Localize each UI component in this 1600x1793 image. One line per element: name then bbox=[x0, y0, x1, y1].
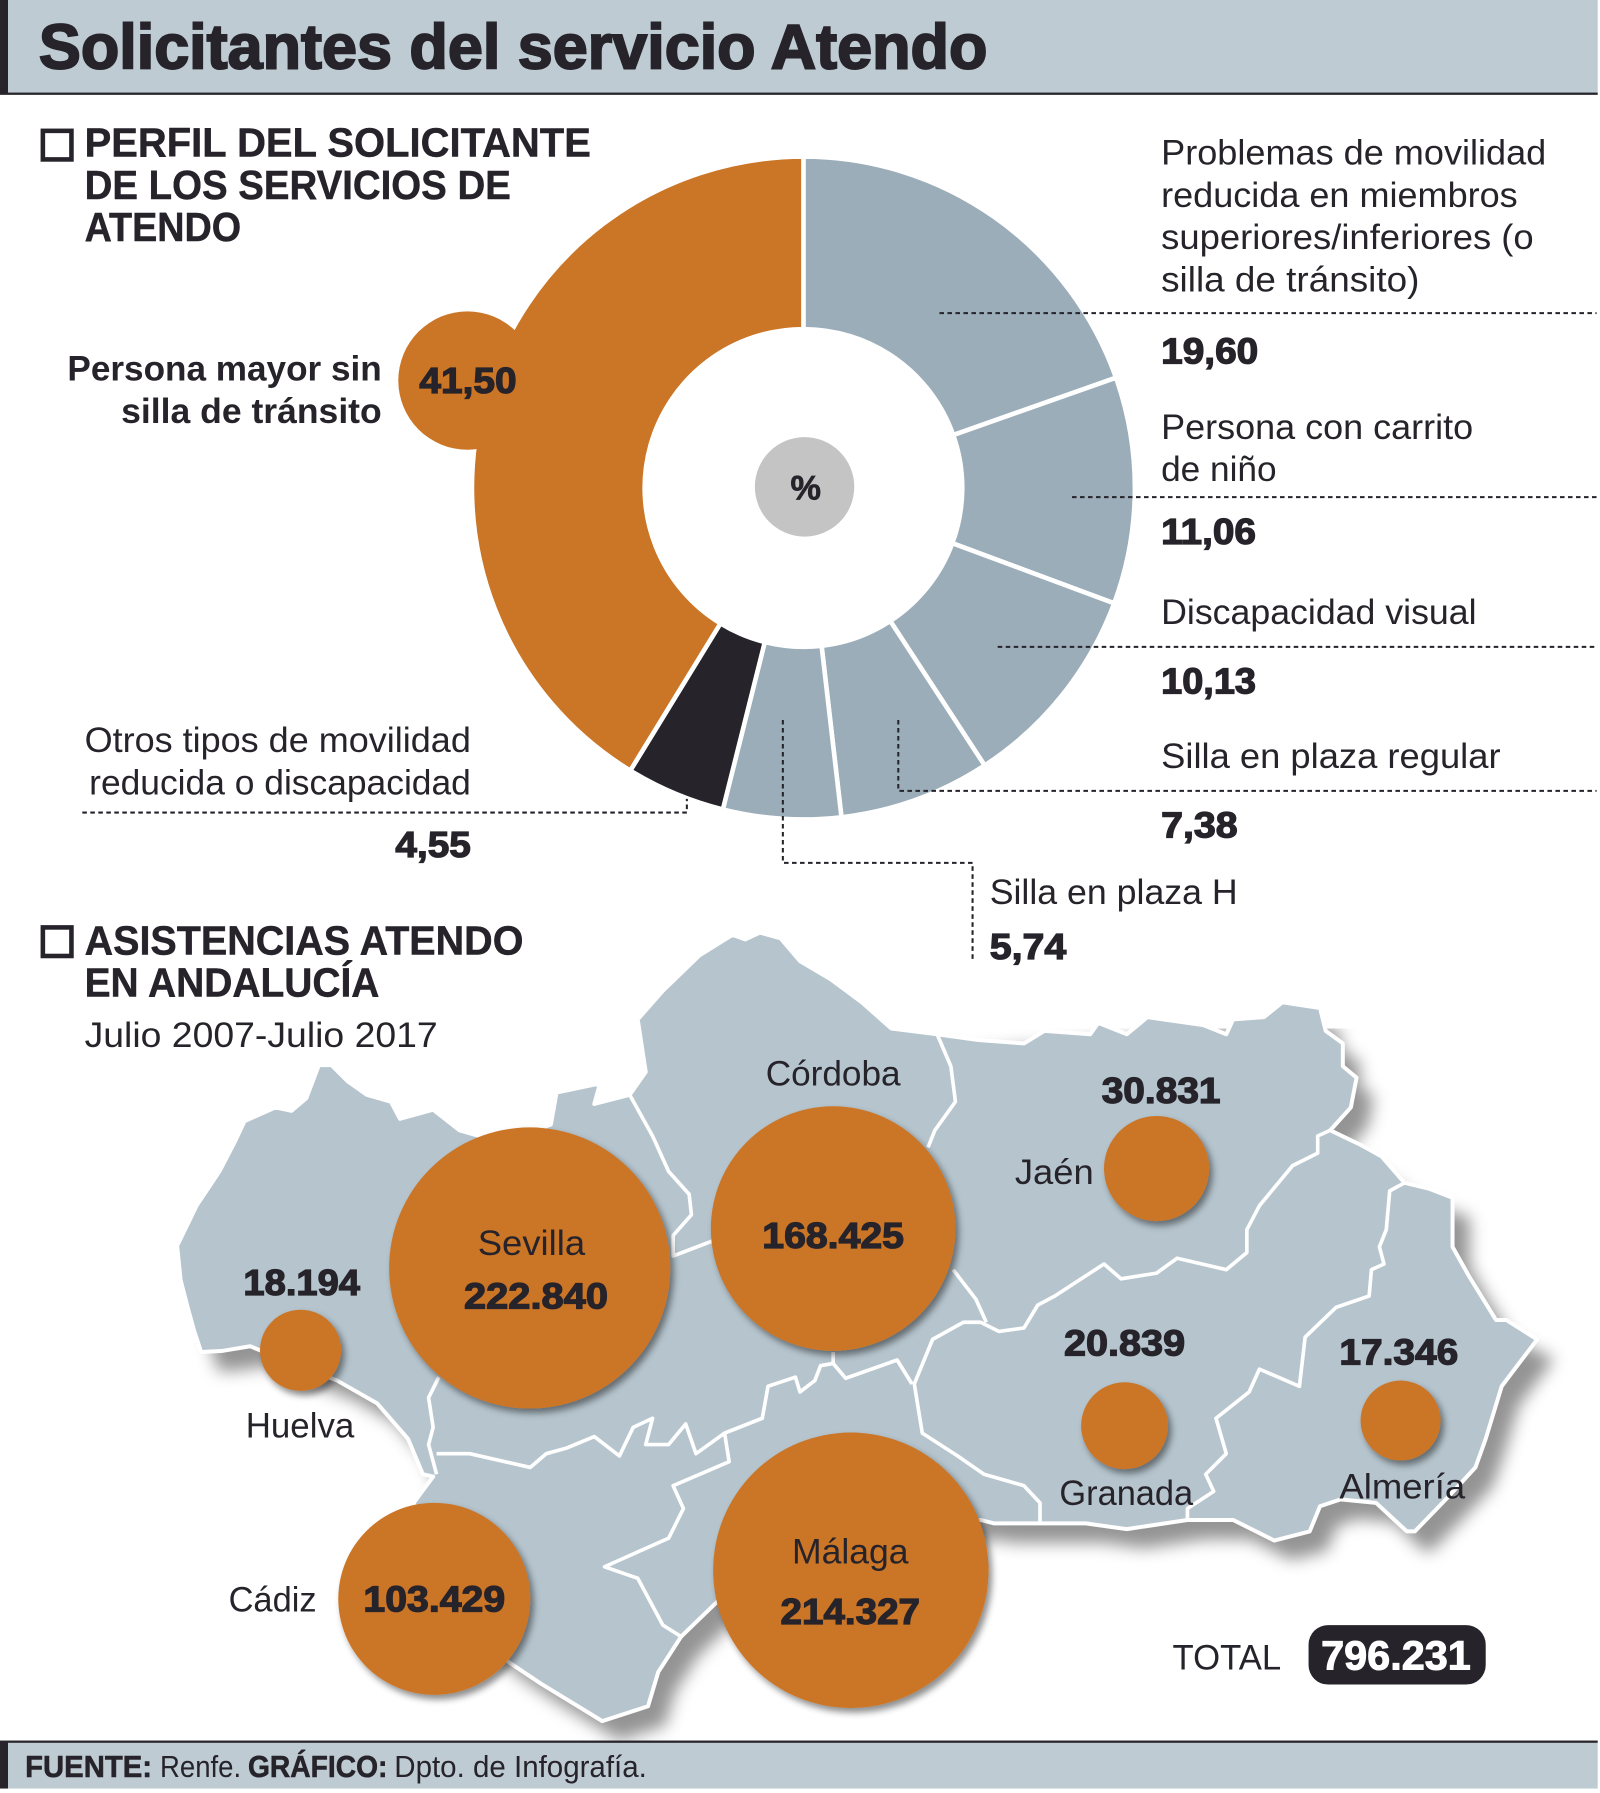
province: Almería bbox=[1339, 1332, 1465, 1506]
province: Jaén bbox=[1015, 1070, 1221, 1221]
heading: perfil del solicitante: PERFIL DEL SOLICITANTE bbox=[85, 120, 591, 166]
label: problemas de movilidad 19,60: Problemas de movilidad bbox=[1161, 133, 1546, 173]
province: Huelva: Huelva bbox=[246, 1406, 355, 1446]
label: otros tipos de movilidad 4,55: Otros tipos de movilidad bbox=[85, 720, 471, 760]
province: Córdoba bbox=[711, 1054, 955, 1351]
label: otros tipos de movilidad 4,55: reducida o discapacidad bbox=[89, 762, 471, 802]
label: otros tipos de movilidad 4,55: 4,55 bbox=[395, 824, 471, 865]
donut chart bbox=[398, 157, 1135, 819]
province: Sevilla: 222.840 bbox=[464, 1276, 608, 1317]
label: problemas de movilidad 19,60: silla de tránsito) bbox=[1161, 259, 1419, 299]
label: persona mayor sin silla de tránsito: silla de tránsito bbox=[121, 391, 382, 431]
label: problemas de movilidad 19,60 bbox=[939, 133, 1597, 371]
heading: asistencias: Julio 2007-Julio 2017 bbox=[85, 1015, 438, 1055]
label: silla en plaza H 5,74: 5,74 bbox=[990, 926, 1067, 967]
province: Sevilla: Sevilla bbox=[478, 1223, 585, 1263]
footer source bar: Dpto. de Infografía. bbox=[394, 1749, 647, 1784]
province: Huelva bbox=[243, 1262, 361, 1446]
province: Sevilla bbox=[389, 1127, 670, 1409]
heading: asistencias: EN ANDALUCÍA bbox=[85, 960, 379, 1006]
header banner bbox=[0, 0, 1598, 95]
center percent badge: % bbox=[790, 469, 821, 507]
label: silla en plaza H 5,74 bbox=[783, 720, 1238, 967]
segment: persona mayor 41,50 bbox=[472, 157, 803, 771]
label: persona mayor sin silla de tránsito bbox=[67, 349, 382, 431]
label: persona mayor sin silla de tránsito: Persona mayor sin bbox=[67, 349, 382, 389]
label: problemas de movilidad 19,60: 19,60 bbox=[1161, 330, 1258, 371]
label: problemas de movilidad 19,60: superiores/inferiores (o bbox=[1161, 217, 1534, 257]
label: persona con carrito de niño 11,06 bbox=[1072, 407, 1597, 552]
province: Málaga: 214.327 bbox=[781, 1591, 920, 1632]
province: Jaén: 30.831 bbox=[1102, 1070, 1221, 1111]
province: Jaén: Jaén bbox=[1015, 1152, 1094, 1192]
province: Huelva: 18.194 bbox=[243, 1262, 361, 1303]
label: silla en plaza regular 7,38 bbox=[898, 720, 1597, 846]
label: discapacidad visual 10,13 bbox=[998, 592, 1597, 702]
province: Cádiz bbox=[229, 1503, 530, 1695]
total bbox=[1173, 1625, 1486, 1685]
bubble: 41,50: 41,50 bbox=[419, 360, 517, 401]
bubble: 41,50 bbox=[398, 311, 537, 450]
province borders bbox=[429, 1034, 1405, 1637]
map outline bbox=[177, 933, 1537, 1721]
title: Solicitantes del servicio Atendo bbox=[39, 13, 987, 83]
province: Málaga bbox=[713, 1433, 989, 1708]
footer source bar: Renfe. bbox=[160, 1749, 241, 1784]
province: Cádiz: Cádiz bbox=[229, 1579, 317, 1619]
heading: perfil del solicitante: ATENDO bbox=[85, 204, 241, 250]
label: persona con carrito de niño 11,06: de niño bbox=[1161, 449, 1277, 489]
label: persona con carrito de niño 11,06: Persona con carrito bbox=[1161, 407, 1473, 447]
total: TOTAL bbox=[1173, 1638, 1281, 1678]
label: discapacidad visual 10,13: Discapacidad visual bbox=[1161, 592, 1477, 632]
label: discapacidad visual 10,13: 10,13 bbox=[1161, 661, 1256, 702]
label: silla en plaza regular 7,38: Silla en plaza regular bbox=[1161, 736, 1501, 776]
province: Granada: 20.839 bbox=[1064, 1322, 1185, 1363]
total: 796.231 bbox=[1321, 1633, 1471, 1679]
label: silla en plaza H 5,74: Silla en plaza H bbox=[990, 872, 1238, 912]
province: Cádiz: 103.429 bbox=[363, 1578, 505, 1619]
footer source bar bbox=[0, 1741, 1598, 1789]
province: Almería: 17.346 bbox=[1339, 1332, 1458, 1373]
province: Córdoba: Córdoba bbox=[766, 1054, 901, 1094]
segment: problemas de movilidad 19,60 bbox=[803, 157, 1116, 435]
map shadow bbox=[194, 954, 1554, 1741]
label: silla en plaza regular 7,38: 7,38 bbox=[1161, 805, 1238, 846]
segment: otros tipos 4,55 bbox=[630, 623, 765, 809]
heading: asistencias: ASISTENCIAS ATENDO bbox=[85, 917, 523, 963]
map of Andalucía bbox=[177, 933, 1554, 1741]
footer source bar: FUENTE: bbox=[25, 1749, 152, 1784]
segment: silla en plaza H 5,74 bbox=[723, 642, 841, 819]
segment: carrito de niño 11,06 bbox=[952, 378, 1135, 603]
segment: silla en plaza regular 7,38 bbox=[822, 621, 985, 817]
label: persona con carrito de niño 11,06: 11,06 bbox=[1161, 511, 1256, 552]
center percent badge bbox=[755, 437, 854, 537]
label: otros tipos de movilidad 4,55 bbox=[82, 720, 687, 865]
heading: perfil del solicitante: DE LOS SERVICIOS DE bbox=[85, 162, 511, 208]
heading: asistencias bbox=[43, 917, 523, 1055]
province: Granada: Granada bbox=[1059, 1473, 1193, 1513]
footer source bar: GRÁFICO: bbox=[248, 1749, 387, 1784]
segment: discapacidad visual 10,13 bbox=[890, 543, 1114, 765]
province: Málaga: Málaga bbox=[792, 1531, 909, 1571]
province: Almería: Almería bbox=[1339, 1466, 1465, 1506]
label: problemas de movilidad 19,60: reducida en miembros bbox=[1161, 175, 1518, 215]
province: Córdoba: 168.425 bbox=[762, 1215, 904, 1256]
heading: perfil del solicitante bbox=[43, 120, 591, 250]
province: Granada bbox=[1059, 1322, 1193, 1513]
